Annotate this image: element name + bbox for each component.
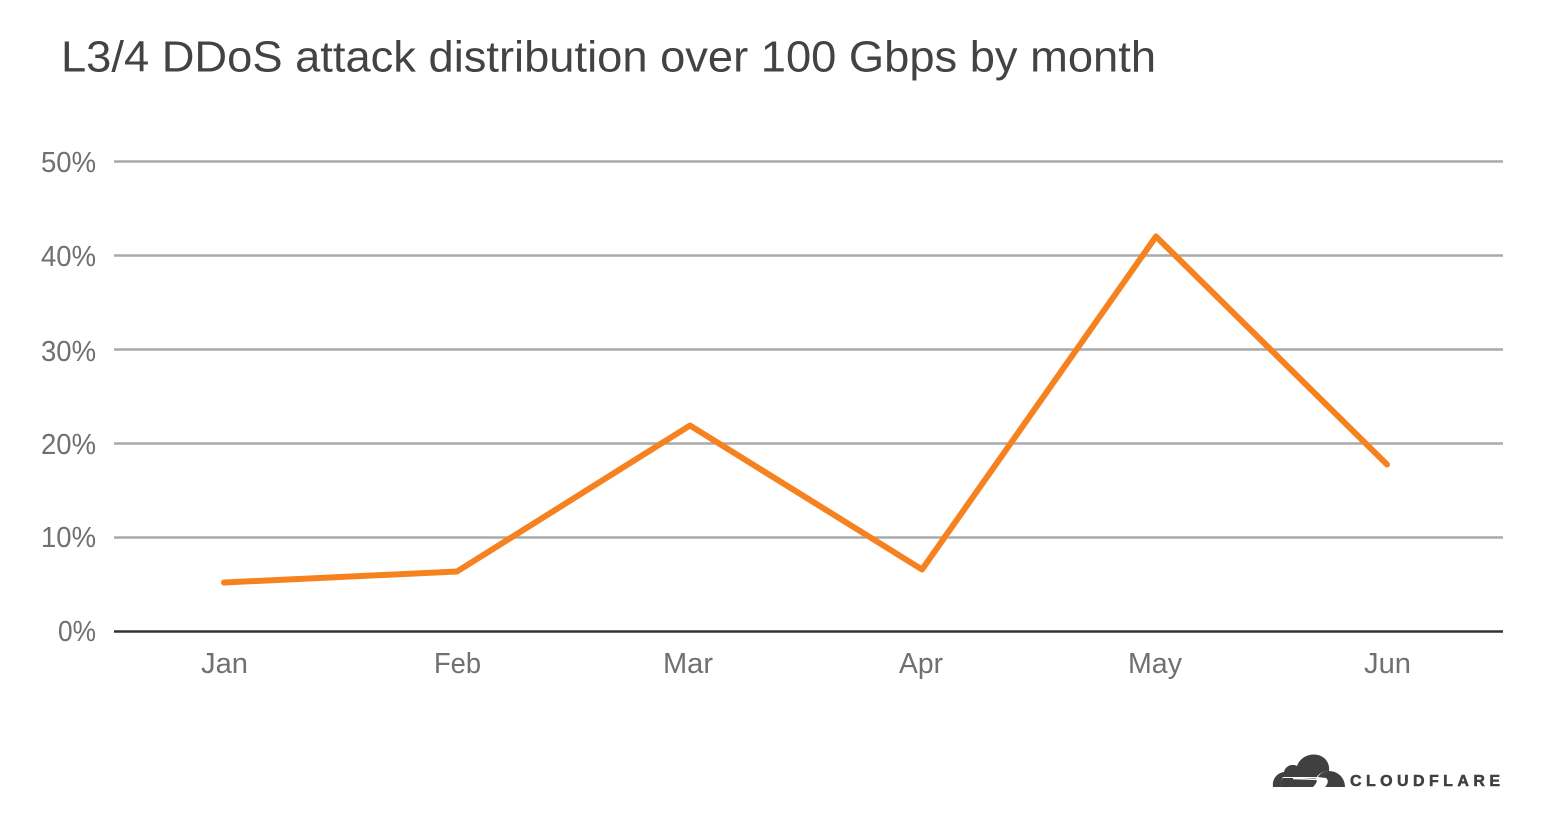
icon: cloud xyxy=(1273,754,1345,787)
y axis labels: 0% xyxy=(58,616,96,648)
y axis labels: 50% xyxy=(41,147,96,179)
y axis labels: 10% xyxy=(41,522,96,554)
y axis labels: 20% xyxy=(41,429,96,461)
x axis labels: May xyxy=(1128,648,1182,680)
x axis labels: Feb xyxy=(434,648,481,680)
x axis labels: Jan xyxy=(201,648,248,680)
y axis labels xyxy=(41,147,96,648)
y axis labels: 30% xyxy=(41,336,96,368)
title: L3/4 DDoS attack distribution over 100 Gbps by month xyxy=(61,32,1156,82)
x axis labels: Apr xyxy=(899,648,943,680)
x axis labels: Mar xyxy=(663,648,713,680)
data line xyxy=(224,236,1387,582)
y axis labels: 40% xyxy=(41,241,96,273)
wordmark: CLOUDFLARE xyxy=(1350,773,1500,790)
x axis labels: Jun xyxy=(1364,648,1411,680)
logo: cloudflare xyxy=(1273,754,1500,790)
line chart xyxy=(41,147,1503,680)
x axis labels xyxy=(201,648,1411,680)
